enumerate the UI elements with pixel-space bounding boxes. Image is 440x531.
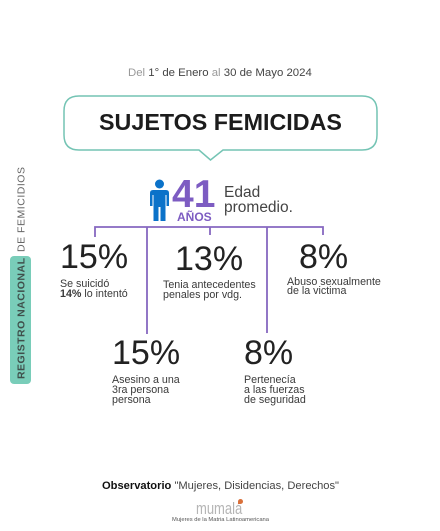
register text: REGISTRO NACIONAL: [16, 257, 28, 379]
stat: prior record: [163, 240, 256, 301]
stat: third person: [112, 334, 180, 406]
stat: suicide: 14% lo intentó: [60, 288, 128, 300]
stat: third person: persona: [112, 394, 151, 406]
stat: third person: 15%: [112, 334, 180, 372]
logo wordmark: mumalá: [196, 499, 242, 518]
icon: person: [150, 180, 169, 221]
stat: security forces: [244, 334, 306, 406]
register text: [16, 167, 28, 379]
observatory credit: Observatorio "Mujeres, Disidencias, Derechos": [102, 480, 339, 492]
title: SUJETOS FEMICIDAS: [99, 109, 342, 135]
vertical register label: [10, 256, 31, 384]
stat: suicide: 15%: [60, 238, 128, 276]
stat: security forces: 8%: [244, 334, 293, 372]
stat: prior record: Tenia antecedentes: [163, 279, 256, 291]
average age number: 41: [172, 173, 215, 216]
stat: security forces: a las fuerzas: [244, 384, 305, 396]
stat: sexual abuse: [287, 238, 381, 297]
stat: suicide: [60, 238, 128, 300]
stat: suicide: Se suicidó: [60, 278, 109, 290]
date range: Del 1° de Enero al 30 de Mayo 2024: [128, 67, 312, 79]
stat: third person: 3ra persona: [112, 384, 169, 396]
stat: security forces: Pertenecía: [244, 374, 296, 386]
stat: sexual abuse: Abuso sexualmente: [287, 276, 381, 288]
stat: prior record: 13%: [175, 240, 243, 278]
stat: sexual abuse: de la victima: [287, 285, 346, 297]
icon: logo accent: [238, 499, 243, 504]
stat: third person: Asesino a una: [112, 374, 180, 386]
average age caption: Edad: [224, 184, 260, 201]
logo tagline: Mujeres de la Matria Latinoamericana: [172, 517, 269, 523]
stat: security forces: de seguridad: [244, 394, 306, 406]
stat: prior record: penales por vdg.: [163, 289, 242, 301]
average age caption: [224, 184, 293, 216]
average age caption: promedio.: [224, 199, 293, 216]
years label: AÑOS: [177, 210, 212, 224]
register text: DE FEMICIDIOS: [16, 167, 28, 252]
stat: sexual abuse: 8%: [299, 238, 348, 276]
